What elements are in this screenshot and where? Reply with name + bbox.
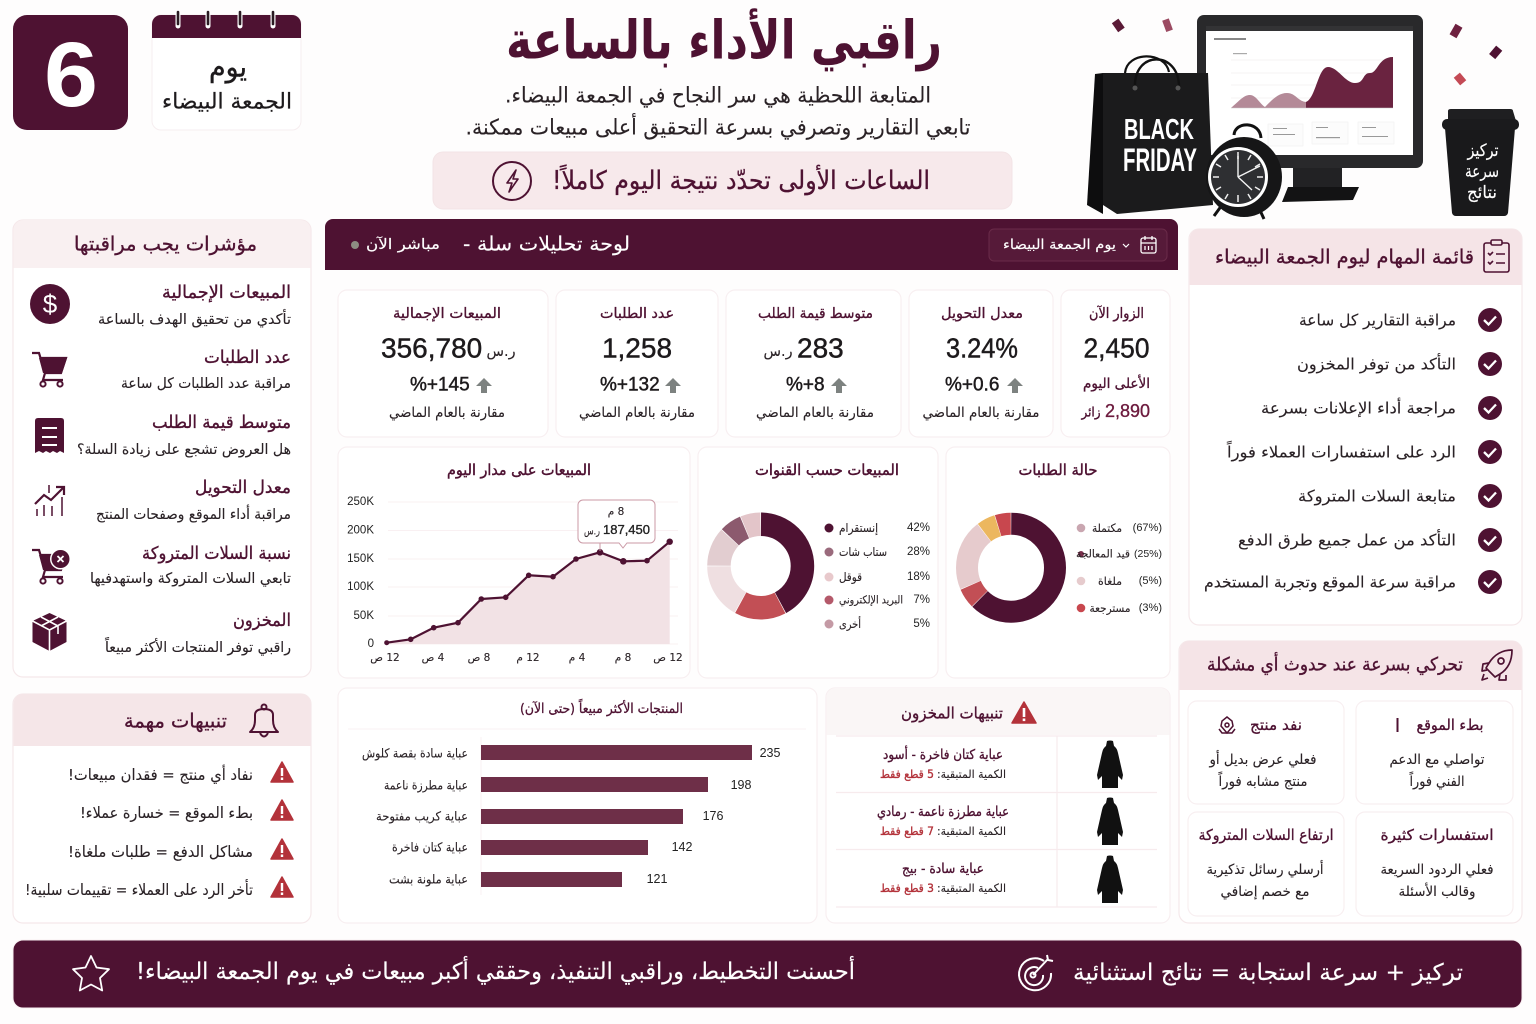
- date dropdown: [989, 229, 1167, 261]
- line chart: sales over the day: 12 م: [516, 652, 540, 664]
- KPI card: visitors: زائر: [1081, 406, 1100, 420]
- task 1: [1299, 308, 1502, 332]
- icon: star: [73, 956, 109, 990]
- item: inventory: [32, 611, 291, 656]
- card: rising abandoned carts: [1188, 812, 1344, 916]
- line chart: sales over the day: 8 م: [615, 652, 631, 664]
- donut chart: order status: [946, 447, 1170, 678]
- alarm clock: [1206, 125, 1282, 219]
- bar chart: best sellers: 176: [703, 809, 723, 823]
- legend: channels: 18%: [907, 571, 930, 583]
- card: rising abandoned carts: مع خصم إضافي: [1220, 884, 1310, 900]
- shopping bag: FRIDAY: [1123, 142, 1197, 178]
- line chart: sales over the day: 100K: [347, 581, 374, 593]
- line chart: sales over the day: 50K: [354, 610, 374, 622]
- legend: channels: [824, 521, 930, 632]
- KPI card: orders: %+132: [600, 374, 660, 396]
- stock row 1: عباية كتان فاخرة - أسود: [883, 745, 1003, 763]
- task 6: [1238, 528, 1502, 552]
- heading: تنبيهات مهمة: [124, 710, 227, 732]
- subtitle: المتابعة اللحظية هي سر النجاح في الجمعة البيضاء.: [505, 84, 931, 108]
- banner equation: تركيز + سرعة استجابة = نتائج استثنائية: [1073, 960, 1463, 986]
- bar chart: best sellers: 198: [731, 778, 751, 792]
- task 3: مراجعة أداء الإعلانات بسرعة: [1261, 398, 1456, 418]
- icon: rocket: [1482, 650, 1512, 680]
- card: slow site: [1356, 701, 1513, 804]
- panel: indicators to monitor: [13, 220, 311, 677]
- stock row 3: عباية سادة - بيج: [902, 861, 984, 877]
- item: average order value: [35, 413, 291, 458]
- KPI card: visitors: 2,450: [1084, 332, 1150, 364]
- line chart: sales over the day: 0: [368, 638, 374, 650]
- confetti: [1112, 18, 1502, 85]
- stock row 1: 5 قطع فقط: [880, 767, 934, 781]
- item: inventory: راقبي توفر المنتجات الأكثر مبيعاً: [104, 637, 291, 656]
- stock row 1: [880, 740, 1123, 788]
- KPI card: total sales: مقارنة بالعام الماضي: [389, 405, 505, 421]
- task 7: [1204, 570, 1502, 594]
- panel: act quickly: [1179, 641, 1522, 923]
- calendar card: [152, 12, 301, 130]
- stock row 3: [880, 856, 1123, 903]
- KPI card: total sales: المبيعات الإجمالية: [393, 306, 501, 322]
- legend: statuses: (25%): [1134, 548, 1162, 560]
- KPI card: total sales: 356,780: [381, 332, 482, 364]
- item: conversion rate: [35, 478, 291, 523]
- tooltip: 8 م: [608, 506, 624, 518]
- alert row 3: [68, 839, 293, 862]
- tooltip: 187,450: [603, 522, 650, 537]
- item: total sales: المبيعات الإجمالية: [162, 283, 291, 303]
- donut chart: sales by channel: [698, 447, 938, 678]
- coffee cup: [1442, 109, 1519, 216]
- KPI card: average order value: %+8: [786, 374, 825, 396]
- legend: channels: 28%: [907, 546, 930, 558]
- card: out of stock: نفد منتج: [1250, 716, 1302, 734]
- shopping bag: BLACK: [1124, 114, 1194, 146]
- item: abandoned carts: [32, 544, 291, 587]
- KPI card: visitors: الأعلى اليوم: [1083, 374, 1150, 392]
- card: rising abandoned carts: أرسلي رسائل تذكيرية: [1206, 860, 1324, 878]
- KPI card: total sales: %+145: [410, 374, 470, 396]
- item: abandoned carts: نسبة السلات المتروكة: [142, 544, 291, 564]
- card: rising abandoned carts: ارتفاع السلات المتروكة: [1198, 826, 1334, 844]
- alert row 3: مشاكل الدفع = طلبات ملغاة!: [68, 843, 253, 862]
- KPI card: total sales: [338, 290, 548, 437]
- donut chart: sales by channel: المبيعات حسب القنوات: [755, 461, 899, 479]
- line chart: sales over the day: 8 ص: [468, 652, 490, 664]
- bar chart: best sellers: عباية مطرزة ناعمة: [384, 778, 468, 794]
- legend: statuses: [1076, 521, 1162, 616]
- stock row 2: عباية مطرزة ناعمة - رمادي: [877, 804, 1009, 820]
- card: slow site: تواصلي مع الدعم: [1390, 752, 1485, 768]
- banner message: أحسنت التخطيط، وراقبي التنفيذ، وحققي أكبر مبيعات في يوم الجمعة البيضاء!: [136, 956, 855, 985]
- dashboard header bar: مباشر الآن: [366, 236, 440, 253]
- item: order count: [32, 348, 291, 392]
- legend: statuses: (3%): [1139, 602, 1162, 614]
- panel: dashboard: [325, 219, 1178, 934]
- stock row 3: 3 قطع فقط: [880, 881, 934, 895]
- line chart: sales over the day: 4 ص: [422, 652, 445, 664]
- bar chart: best sellers: [338, 688, 817, 923]
- donut chart: order status: حالة الطلبات: [1018, 461, 1098, 479]
- panel: black friday checklist: [1189, 229, 1522, 625]
- line chart: sales over the day: 150K: [347, 553, 374, 565]
- alert row 4: تأخر الرد على العملاء = تقييمات سلبية!: [25, 879, 253, 899]
- task 3: [1261, 396, 1502, 420]
- item: total sales: $: [43, 289, 58, 319]
- card: out of stock: منتج مشابه فوراً: [1218, 771, 1308, 790]
- line chart: sales over the day: 12 ص: [370, 652, 400, 664]
- bar chart: best sellers: عباية كتان فاخرة: [392, 840, 468, 856]
- tooltip: [578, 500, 655, 551]
- task 5: متابعة السلات المتروكة: [1298, 486, 1456, 506]
- card: many inquiries: استفسارات كثيرة: [1380, 826, 1494, 844]
- alert row 1: نفاد أي منتج = فقدان مبيعات!: [68, 764, 253, 785]
- tooltip: ر.س: [584, 524, 600, 538]
- KPI card: orders: [556, 290, 718, 437]
- bar chart: best sellers: عباية ملونة بشت: [389, 872, 468, 888]
- bottom banner: [13, 940, 1522, 1008]
- legend: channels: 5%: [913, 618, 930, 630]
- heading: تحركي بسرعة عند حدوث أي مشكلة: [1207, 652, 1463, 676]
- item: average order value: هل العروض تشجع على زيادة السلة؟: [77, 442, 291, 458]
- icon: bell: [250, 704, 278, 736]
- day number badge: [13, 15, 128, 130]
- task 6: التأكد من عمل جميع طرق الدفع: [1238, 528, 1456, 550]
- stock row 2: 7 قطع فقط: [880, 824, 934, 838]
- callout: first hours: الساعات الأولى تحدّد نتيجة اليوم كاملاً!: [552, 163, 930, 196]
- icon: clipboard: [1484, 240, 1509, 272]
- alert row 2: [80, 800, 293, 823]
- KPI card: average order value: متوسط قيمة الطلب: [758, 306, 873, 322]
- legend: statuses: (67%): [1133, 522, 1162, 534]
- legend: channels: 7%: [913, 594, 930, 606]
- icon: lightning bolt: [493, 162, 531, 200]
- title: راقبي الأداء بالساعة: [506, 8, 942, 72]
- bar chart: best sellers: 235: [760, 746, 780, 760]
- alert row 2: بطء الموقع = خسارة عملاء!: [80, 804, 253, 823]
- calendar card: يوم: [209, 50, 247, 84]
- icon: warning: [1012, 702, 1036, 723]
- panel: important alerts: [13, 694, 311, 923]
- date dropdown: يوم الجمعة البيضاء: [1003, 237, 1116, 253]
- heading: قائمة المهام ليوم الجمعة البيضاء: [1215, 246, 1474, 268]
- card: slow site: الفني فوراً: [1409, 771, 1464, 790]
- KPI card: visitors: [1061, 290, 1170, 437]
- KPI card: orders: مقارنة بالعام الماضي: [579, 405, 695, 421]
- card: many inquiries: فعلي الردود السريعة: [1380, 862, 1494, 878]
- KPI card: conversion rate: %+0.6: [945, 374, 999, 396]
- legend: statuses: (5%): [1139, 575, 1162, 587]
- line chart: sales over the day: 250K: [347, 496, 374, 508]
- legend: channels: ستاب شات: [839, 545, 887, 559]
- KPI card: conversion rate: معدل التحويل: [941, 306, 1023, 322]
- item: average order value: متوسط قيمة الطلب: [152, 413, 291, 433]
- card: out of stock: فعلي عرض بديل أو: [1209, 750, 1316, 768]
- item: abandoned carts: تابعي السلات المتروكة واستهدفيها: [90, 571, 291, 587]
- legend: statuses: ملغاة: [1098, 574, 1122, 588]
- item: total sales: تأكدي من تحقيق الهدف بالساعة: [98, 309, 291, 328]
- legend: statuses: مسترجعة: [1090, 601, 1130, 616]
- stock row 2: [877, 798, 1123, 845]
- panel: inventory alerts: [826, 688, 1170, 923]
- legend: statuses: مكتملة: [1092, 521, 1122, 535]
- card: out of stock: [1188, 701, 1344, 804]
- item: conversion rate: معدل التحويل: [195, 478, 291, 498]
- card: many inquiries: [1356, 812, 1513, 916]
- callout: first hours: [433, 152, 1012, 209]
- bar chart: best sellers: المنتجات الأكثر مبيعاً (حتى الآن): [520, 698, 683, 717]
- coffee cup: نتائج: [1467, 183, 1497, 203]
- KPI card: conversion rate: 3.24%: [946, 332, 1018, 364]
- item: conversion rate: مراقبة أداء الموقع وصفحات المنتج: [96, 504, 291, 523]
- KPI card: average order value: ر.س: [764, 342, 792, 360]
- bar chart: best sellers: 142: [672, 840, 692, 854]
- shopping bag: [1087, 56, 1213, 214]
- legend: channels: 42%: [907, 522, 930, 534]
- coffee cup: تركيز: [1467, 141, 1499, 161]
- legend: channels: البريد الإلكتروني: [839, 594, 903, 606]
- KPI card: visitors: الزوار الآن: [1089, 305, 1144, 322]
- legend: channels: إنستقرام: [839, 521, 878, 536]
- line chart: sales over the day: 12 ص: [653, 652, 683, 664]
- KPI card: average order value: مقارنة بالعام الماضي: [756, 405, 874, 421]
- coffee cup: سرعة: [1465, 162, 1499, 182]
- task 5: [1298, 484, 1502, 508]
- task 4: [1226, 440, 1502, 464]
- dashboard header bar: لوحة تحليلات سلة -: [463, 232, 630, 256]
- hero illustration: black friday products: [1087, 15, 1519, 219]
- legend: channels: أخرى: [839, 616, 861, 632]
- task 2: [1297, 352, 1502, 376]
- bar chart: best sellers: عباية كريب مفتوحة: [376, 808, 468, 824]
- subtitle: تابعي التقارير وتصرفي بسرعة التحقيق أعلى مبيعات ممكنة.: [466, 112, 971, 140]
- KPI card: conversion rate: [909, 290, 1053, 437]
- subtitle: [466, 84, 971, 140]
- calendar card: الجمعة البيضاء: [162, 90, 292, 114]
- card: slow site: بطء الموقع: [1416, 716, 1484, 734]
- task 4: الرد على استفسارات العملاء فوراً: [1226, 440, 1456, 462]
- KPI card: visitors: 2,890: [1105, 401, 1150, 421]
- task 1: مراقبة التقارير كل ساعة: [1299, 310, 1456, 330]
- KPI card: average order value: 283: [797, 332, 844, 364]
- stock row 3: الكمية المتبقية:: [937, 881, 1006, 895]
- legend: statuses: قيد المعالجة: [1076, 548, 1130, 560]
- line chart: sales over the day: 200K: [347, 524, 374, 536]
- monitor: [1197, 15, 1423, 202]
- KPI card: orders: 1,258: [602, 332, 672, 364]
- day number badge: 6: [44, 24, 98, 126]
- alert row 1: [68, 762, 293, 785]
- stock row 2: الكمية المتبقية:: [937, 824, 1006, 838]
- stock row 1: الكمية المتبقية:: [937, 767, 1006, 781]
- KPI card: conversion rate: مقارنة بالعام الماضي: [922, 405, 1040, 421]
- bar chart: best sellers: 121: [647, 872, 667, 886]
- task 7: مراقبة سرعة الموقع وتجربة المستخدم: [1204, 572, 1456, 592]
- panel: inventory alerts: تنبيهات المخزون: [901, 704, 1003, 724]
- heading: مؤشرات يجب مراقبتها: [74, 232, 257, 256]
- icon: target: [1019, 955, 1053, 990]
- dashboard header bar: [325, 219, 1178, 270]
- line chart: sales over the day: المبيعات على مدار اليوم: [447, 461, 591, 479]
- line chart: sales over the day: 4 م: [569, 652, 586, 664]
- KPI card: average order value: [726, 290, 901, 437]
- legend: channels: قوقل: [839, 570, 862, 585]
- KPI card: total sales: ر.س: [486, 342, 516, 360]
- item: total sales: [30, 283, 291, 328]
- line chart: sales over the day: [338, 447, 690, 678]
- item: order count: عدد الطلبات: [204, 348, 291, 368]
- KPI card: orders: عدد الطلبات: [600, 306, 674, 322]
- task 2: التأكد من توفر المخزون: [1297, 352, 1456, 374]
- bar chart: best sellers: عباية سادة بقصة كلوش: [362, 746, 468, 762]
- card: many inquiries: وقالب الأسئلة: [1398, 882, 1476, 900]
- item: inventory: المخزون: [233, 611, 291, 631]
- item: order count: مراقبة عدد الطلبات كل ساعة: [121, 376, 291, 392]
